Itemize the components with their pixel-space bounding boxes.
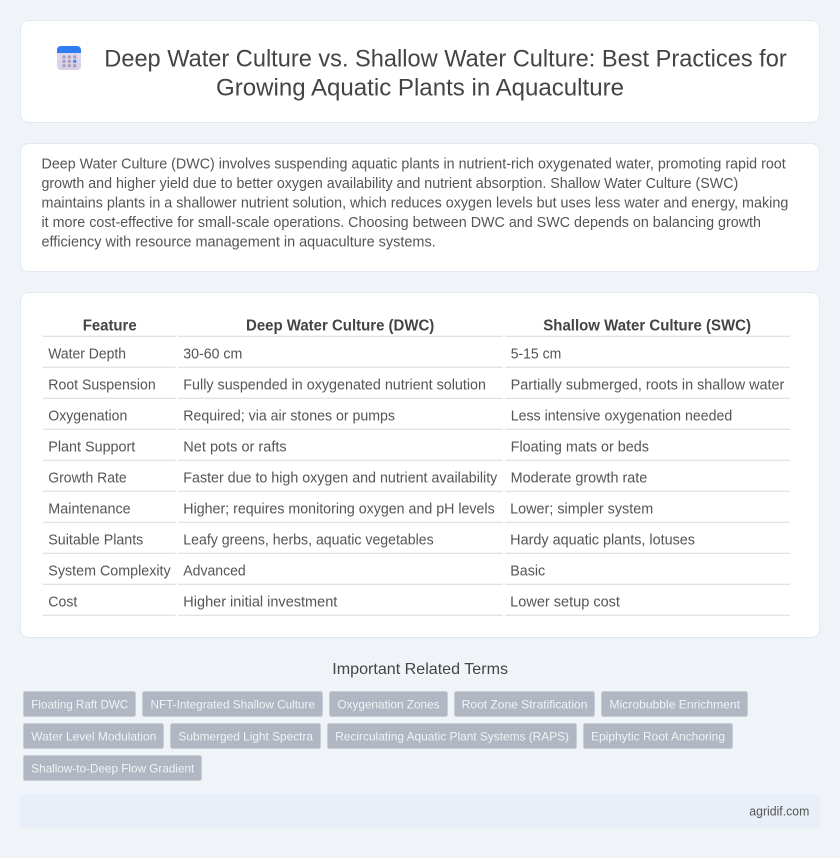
- row: suitable plants: Hardy aquatic plants, lotuses: [510, 532, 695, 548]
- row: water depth: Water Depth: [48, 346, 126, 362]
- row: root suspension: [48, 377, 785, 393]
- footer: site name: agridif.com: [749, 803, 809, 818]
- panel: title card: [20, 20, 820, 122]
- tag: floating raft DWC: Floating Raft DWC: [31, 697, 129, 711]
- row: plant support: [48, 439, 649, 455]
- heading: related terms: Important Related Terms: [332, 661, 508, 678]
- tag: oxygenation zones: Oxygenation Zones: [338, 697, 440, 711]
- title: Deep Water Culture vs. Shallow Water Culture: Best Practices for: [104, 46, 787, 73]
- title: Growing Aquatic Plants in Aquaculture: [216, 75, 624, 102]
- row: maintenance: [48, 501, 653, 517]
- row: oxygenation: Less intensive oxygenation needed: [511, 408, 732, 424]
- row: system complexity: System Complexity: [48, 563, 172, 579]
- row: oxygenation: Oxygenation: [48, 408, 127, 424]
- row: maintenance: Lower; simpler system: [510, 501, 653, 517]
- row: growth rate: Moderate growth rate: [511, 470, 647, 486]
- row: root suspension: Fully suspended in oxygenated nutrient solution: [183, 377, 486, 393]
- row: suitable plants: Leafy greens, herbs, aquatic vegetables: [183, 532, 434, 548]
- tag: water level modulation: [24, 724, 164, 748]
- row: water depth: [48, 346, 561, 362]
- tag: epiphytic root anchoring: Epiphytic Root Anchoring: [591, 729, 725, 743]
- text block: description: efficiency with resource management in aquaculture systems.: [42, 234, 436, 250]
- row: suitable plants: [48, 532, 695, 548]
- tag: submerged light spectra: Submerged Light Spectra: [178, 729, 313, 743]
- panel: intro paragraph: [20, 144, 820, 272]
- icon: calendar: [57, 46, 81, 70]
- tag: NFT-integrated shallow culture: [142, 692, 322, 716]
- text block: description: it more cost-effective for small-scale operations. Choosing between DWC and SWC depends on balancing growth: [42, 215, 761, 231]
- row: system complexity: Advanced: [183, 563, 246, 579]
- tag: recirculating aquatic plant systems: Recirculating Aquatic Plant Systems (RAPS): [335, 729, 569, 743]
- text block: description: maintains plants in a shallower nutrient solution, which reduces oxygen levels but uses less water and energy, making: [42, 195, 788, 211]
- tag: root zone stratification: [454, 692, 594, 716]
- text block: description: [42, 156, 788, 250]
- tag: NFT-integrated shallow culture: NFT-Integrated Shallow Culture: [150, 697, 315, 711]
- row: plant support: Floating mats or beds: [511, 439, 649, 455]
- row: plant support: Plant Support: [48, 439, 135, 455]
- row: water depth: 30-60 cm: [183, 346, 242, 362]
- row: growth rate: [48, 470, 647, 486]
- row: oxygenation: [48, 408, 732, 424]
- row: growth rate: Growth Rate: [48, 470, 127, 486]
- table header: [83, 318, 751, 335]
- tag: shallow-to-deep flow gradient: [24, 756, 202, 780]
- row: cost: Higher initial investment: [183, 594, 337, 610]
- tag: submerged light spectra: [170, 724, 320, 748]
- row: root suspension: Partially submerged, roots in shallow water: [511, 377, 785, 393]
- footer bar: [20, 794, 820, 828]
- row: cost: Cost: [48, 594, 77, 610]
- tag: microbubble enrichment: Microbubble Enrichment: [610, 697, 741, 711]
- table header: Shallow Water Culture (SWC): [543, 318, 751, 335]
- tag: recirculating aquatic plant systems: [328, 724, 576, 748]
- tag: microbubble enrichment: [602, 692, 748, 716]
- tag: water level modulation: Water Level Modulation: [31, 729, 156, 743]
- tag: oxygenation zones: [330, 692, 448, 716]
- tag: shallow-to-deep flow gradient: Shallow-to-Deep Flow Gradient: [31, 761, 195, 775]
- row: cost: [48, 594, 620, 610]
- tag: root zone stratification: Root Zone Stratification: [462, 697, 587, 711]
- tag: epiphytic root anchoring: [584, 724, 732, 748]
- text block: description: Deep Water Culture (DWC) involves suspending aquatic plants in nutrient-rich oxygenated water, promoting rapid root: [42, 156, 786, 172]
- row: oxygenation: Required; via air stones or pumps: [183, 408, 395, 424]
- row: system complexity: Basic: [510, 563, 545, 579]
- row: plant support: Net pots or rafts: [183, 439, 287, 455]
- text block: description: growth and higher yield due to better oxygen availability and nutrient absorption. Shallow Water Culture (SWC): [42, 176, 738, 192]
- row: root suspension: Root Suspension: [48, 377, 156, 393]
- panel: comparison table: [20, 292, 820, 638]
- row: suitable plants: Suitable Plants: [48, 532, 143, 548]
- row: system complexity: [48, 563, 545, 579]
- table header: Deep Water Culture (DWC): [246, 318, 434, 335]
- panel: related term tags: [24, 692, 748, 780]
- title: [104, 46, 787, 102]
- row: cost: Lower setup cost: [510, 594, 620, 610]
- row: growth rate: Faster due to high oxygen and nutrient availability: [183, 470, 498, 486]
- row: maintenance: Maintenance: [48, 501, 131, 517]
- row: water depth: 5-15 cm: [511, 346, 561, 362]
- row: maintenance: Higher; requires monitoring oxygen and pH levels: [183, 501, 495, 517]
- tag: floating raft DWC: [24, 692, 136, 716]
- table header: Feature: [83, 318, 137, 335]
